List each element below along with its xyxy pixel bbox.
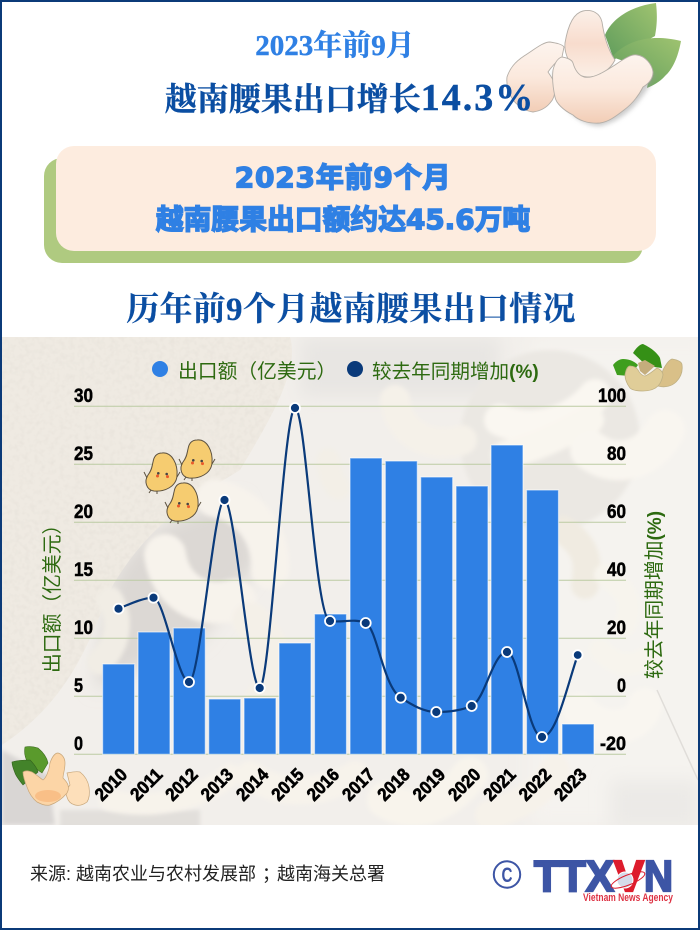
line: year-on-year growth bbox=[118, 408, 578, 737]
x axis year labels bbox=[91, 764, 590, 805]
x axis year labels: 2019 bbox=[409, 764, 449, 805]
x axis year labels: 2014 bbox=[232, 764, 272, 805]
x axis year labels: 2015 bbox=[267, 764, 308, 805]
icon: golden cashews with leaves bbox=[613, 344, 682, 391]
x axis year labels: 2020 bbox=[444, 764, 484, 805]
subtitle: date: 2023年前9月 bbox=[255, 30, 415, 62]
callout line 2: 越南腰果出口额约达45.6万吨 bbox=[156, 203, 530, 236]
main title: 越南腰果出口增长14.3% bbox=[165, 77, 535, 119]
line markers bbox=[114, 403, 582, 742]
left axis labels: 30 bbox=[74, 386, 93, 407]
left axis labels: 0 bbox=[74, 734, 83, 755]
x axis year labels: 2017 bbox=[338, 764, 378, 805]
legend: 出口额（亿美元） bbox=[178, 361, 336, 383]
left axis labels: 20 bbox=[74, 502, 93, 523]
legend bbox=[152, 361, 539, 383]
right axis labels: 40 bbox=[607, 560, 626, 581]
logo: copyright mark and TTXVN: V bbox=[614, 852, 645, 901]
photo background: burlap and cashews bbox=[2, 337, 698, 825]
x axis year labels: 2012 bbox=[161, 764, 202, 805]
legend: 较去年同期增加(%) bbox=[372, 361, 539, 383]
chart heading: 历年前9个月越南腰果出口情况 bbox=[126, 292, 576, 328]
source note: 来源: 越南农业与农村发展部 越南海关总署 bbox=[30, 864, 385, 884]
panel: key figure callout bbox=[44, 146, 656, 263]
right axis labels: -20 bbox=[600, 734, 626, 755]
x axis year labels: 2010 bbox=[91, 764, 131, 805]
panel shadow: green backing bbox=[44, 158, 643, 263]
left axis labels bbox=[74, 386, 93, 755]
left axis labels: 25 bbox=[74, 444, 93, 465]
x axis year labels: 2013 bbox=[197, 764, 237, 805]
source note: ； bbox=[262, 864, 280, 884]
left axis labels: 10 bbox=[74, 618, 93, 639]
x axis year labels: 2022 bbox=[515, 764, 555, 805]
left axis title: 出口额（亿美元） bbox=[42, 515, 64, 673]
right axis labels bbox=[598, 386, 626, 755]
right axis labels: 60 bbox=[607, 502, 626, 523]
left axis labels: 5 bbox=[74, 676, 83, 697]
logo: copyright mark and TTXVN bbox=[492, 852, 674, 904]
right axis labels: 80 bbox=[607, 444, 626, 465]
x axis year labels: 2021 bbox=[479, 764, 520, 805]
icon: orange cashews with leaves bbox=[12, 747, 89, 805]
right axis title: 较去年同期增加(%) bbox=[644, 511, 666, 679]
bars: export value bbox=[103, 445, 594, 754]
logo: copyright mark and TTXVN: TTX bbox=[534, 852, 614, 901]
x axis year labels: 2016 bbox=[303, 764, 343, 805]
logo: copyright mark and TTXVN: N bbox=[644, 852, 673, 901]
right axis labels: 0 bbox=[617, 676, 626, 697]
logo: copyright mark and TTXVN: C bbox=[502, 864, 512, 887]
combo chart: export value bars and growth line bbox=[12, 344, 683, 806]
x axis year labels: 2018 bbox=[373, 764, 414, 805]
right axis labels: 20 bbox=[607, 618, 626, 639]
x axis year labels: 2011 bbox=[126, 764, 166, 805]
left axis labels: 15 bbox=[74, 560, 93, 581]
icon: three cartoon cashews bbox=[144, 440, 215, 524]
panel face: cream card bbox=[56, 146, 656, 251]
callout line 1: 2023年前9个月 bbox=[235, 161, 451, 194]
x axis year labels: 2023 bbox=[550, 764, 590, 805]
right axis labels: 100 bbox=[598, 386, 626, 407]
illustration: cashews with leaves, top right bbox=[506, 3, 681, 128]
